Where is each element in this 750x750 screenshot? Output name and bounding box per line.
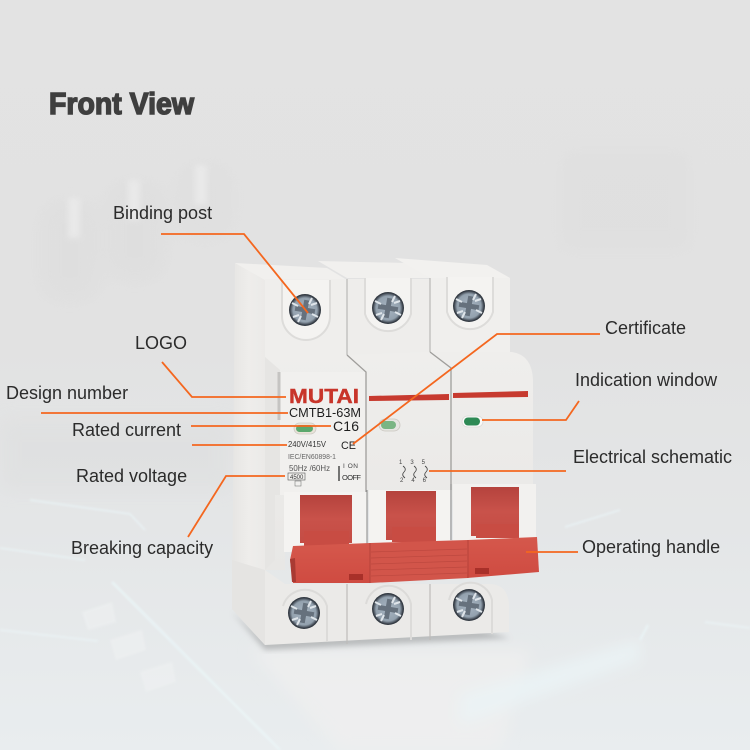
red stripes	[369, 394, 449, 401]
label: certificate: Certificate	[605, 318, 686, 338]
product: circuit breaker: 4500	[290, 475, 304, 481]
label: indication window: Indication window	[575, 370, 718, 390]
title: Front View	[49, 86, 195, 121]
label: rated voltage: Rated voltage	[76, 466, 187, 486]
product: circuit breaker: CMTB1-63M	[289, 405, 361, 420]
ground shadow	[232, 612, 510, 650]
line: operating handle	[526, 551, 578, 553]
top screws	[289, 294, 321, 326]
electrical schematic print	[399, 460, 427, 484]
product: circuit breaker	[232, 258, 539, 650]
bottom screws	[288, 597, 320, 629]
line: rated voltage	[192, 444, 287, 446]
label: operating handle: Operating handle	[582, 537, 720, 557]
middle cover	[265, 352, 533, 570]
product: circuit breaker: IEC/EN60898-1	[288, 454, 336, 461]
label: design number: Design number	[6, 383, 128, 403]
product: circuit breaker: 50Hz /60Hz	[289, 464, 330, 473]
label: binding post: Binding post	[113, 203, 212, 223]
line: binding post	[161, 234, 308, 313]
linked operating handle	[290, 543, 370, 583]
line: certificate	[353, 334, 600, 444]
product: circuit breaker: OOFF	[342, 473, 361, 482]
line: breaking capacity	[188, 476, 285, 537]
terminal roofs	[235, 263, 347, 280]
electrical schematic print: 1 3 5	[399, 460, 426, 466]
printed labels: MUTAI	[289, 386, 359, 408]
label: logo: LOGO	[135, 333, 187, 353]
lower terminal block	[265, 570, 509, 645]
line: indication window	[482, 401, 579, 420]
label: rated current: Rated current	[72, 420, 181, 440]
callout lines	[41, 234, 600, 552]
label: electrical schematic: Electrical schematic	[573, 447, 732, 467]
line: electrical schematic	[429, 470, 566, 472]
product: circuit breaker: 240V/415V	[288, 439, 326, 449]
line: rated current	[191, 425, 331, 427]
indication windows	[294, 416, 483, 434]
product: circuit breaker: CE	[341, 440, 356, 452]
product: circuit breaker: C16	[333, 418, 359, 434]
red rocker paddles	[300, 495, 352, 543]
screw recess outlines	[282, 280, 330, 340]
callout labels	[6, 203, 732, 558]
rocker housings	[284, 492, 367, 552]
line: design number	[41, 412, 288, 414]
left side of housing	[232, 263, 265, 645]
top terminal block	[265, 279, 365, 372]
line: logo	[162, 362, 286, 397]
label: breaking capacity: Breaking capacity	[71, 538, 213, 558]
product: circuit breaker: I ON	[343, 463, 358, 470]
electrical schematic print: 2 4 6	[400, 478, 427, 484]
